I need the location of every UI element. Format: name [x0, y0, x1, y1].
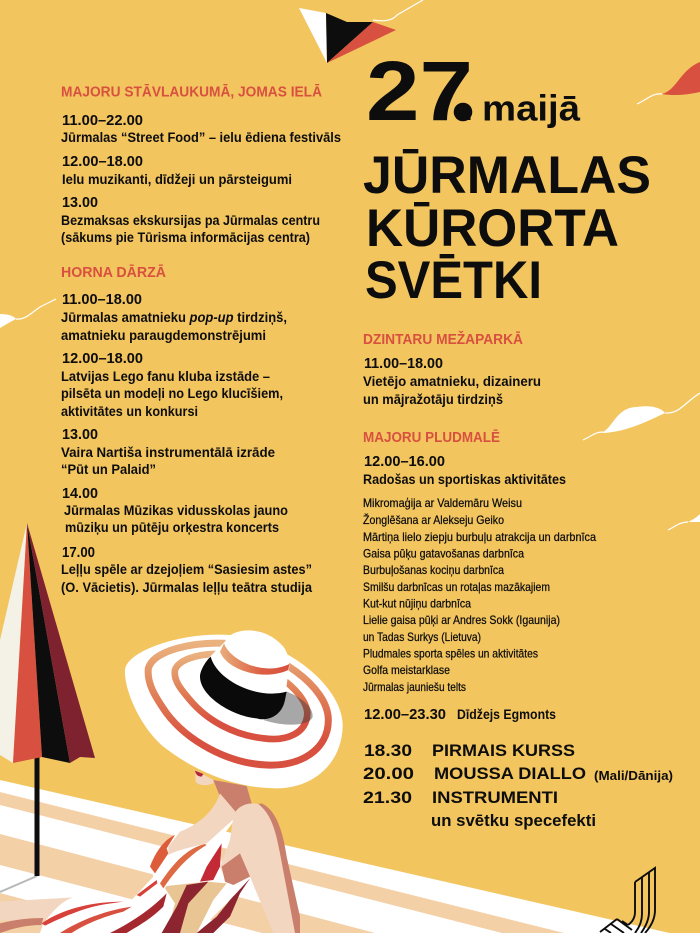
concert schedule [363, 741, 673, 830]
activities list [363, 496, 596, 694]
title: KŪRORTA [366, 199, 619, 258]
kite: white right [668, 514, 700, 530]
activities list: Kut-kut nūjiņu darbnīca [363, 596, 471, 610]
panel: Dzintaru mežaparkā: Vietējo amatnieku, dizaineru [363, 374, 541, 389]
panel: Horna dārzā: Jūrmalas amatnieku pop-up tirdziņš, [61, 310, 287, 325]
panel: Horna dārzā: 14.00 [62, 486, 98, 502]
activities list: Lielie gaisa pūķi ar Andres Sokk (Igaunija) [363, 613, 560, 627]
panel: Horna dārzā: 11.00–18.00 [62, 292, 142, 308]
date: 27. maijā: . [458, 66, 475, 133]
activities list: Jūrmalas jauniešu telts [363, 680, 466, 694]
activities list: Smilšu darbnīcas un rotaļas mazākajiem [363, 580, 550, 594]
title: JŪRMALAS [363, 146, 651, 205]
activities list: Burbuļošanas kociņu darbnīca [363, 563, 504, 577]
woman in striped swimsuit [0, 770, 300, 933]
panel: Horna dārzā: HORNA DĀRZĀ [61, 264, 167, 281]
panel: Horna dārzā: Leļļu spēle ar dzejoļiem “Sasiesim astes” [61, 562, 312, 577]
panel: Majoru pludmalē: 12.00–16.00 [364, 454, 445, 470]
kite: white left [0, 299, 56, 328]
panel: Horna dārzā: Vaira Nartiša instrumentālā izrāde [61, 445, 275, 460]
panel: Majoru stāvlaukumā: (sākums pie Tūrisma informācijas centra) [61, 230, 310, 245]
activities list: Žonglēšana ar Alekseju Geiko [363, 513, 504, 527]
panel: Majoru stāvlaukumā: Jūrmalas “Street Food” – ielu ēdiena festivāls [61, 130, 341, 145]
panel: Majoru pludmalē: Radošas un sportiskas aktivitātes [363, 472, 566, 487]
panel: Horna dārzā: amatnieku paraugdemonstrējumi [61, 328, 266, 343]
panel: Majoru pludmalē: MAJORU PLUDMALĒ [363, 429, 500, 446]
panel: Majoru stāvlaukumā: MAJORU STĀVLAUKUMĀ, JOMAS IELĀ [61, 84, 322, 100]
panel: Dzintaru mežaparkā [363, 330, 541, 407]
title [363, 146, 651, 310]
panel: Majoru stāvlaukumā: Ielu muzikanti, dīdžeji un pārsteigumi [62, 172, 292, 187]
panel: Majoru stāvlaukumā [61, 84, 341, 245]
panel: Horna dārzā: 13.00 [62, 427, 98, 443]
panel: Majoru stāvlaukumā: 12.00–18.00 [62, 154, 143, 170]
panel: Horna dārzā: aktivitātes un konkursi [61, 404, 198, 419]
panel: Horna dārzā: Jūrmalas Mūzikas vidusskolas jauno [64, 503, 288, 518]
panel: Majoru pludmalē: 12.00–23.30 [364, 707, 446, 723]
activities list: Mikromaģija ar Valdemāru Weisu [363, 496, 522, 510]
panel: Majoru pludmalē: Dīdžejs Egmonts [457, 707, 556, 722]
panel: Horna dārzā: 12.00–18.00 [62, 351, 143, 367]
logo: Jūrmala J [600, 868, 655, 933]
panel: Horna dārzā [61, 264, 312, 595]
panel: Dzintaru mežaparkā: 11.00–18.00 [364, 356, 443, 372]
concert schedule: 21.30 [363, 788, 412, 807]
panel: Horna dārzā: mūziķu un pūtēju orķestra koncerts [65, 520, 279, 535]
concert schedule: INSTRUMENTI [432, 788, 558, 807]
concert schedule: 20.00 [363, 764, 414, 783]
concert schedule: MOUSSA DIALLO [434, 764, 586, 783]
activities list: Mārtiņa lielo ziepju burbuļu atrakcija un darbnīca [363, 530, 596, 544]
panel: Majoru pludmalē [363, 429, 596, 723]
activities list: un Tadas Surkys (Lietuva) [363, 630, 481, 644]
activities list: Pludmales sporta spēles un aktivitātes [363, 646, 538, 660]
panel: Dzintaru mežaparkā: un mājražotāju tirdziņš [363, 392, 503, 407]
panel: Horna dārzā: Latvijas Lego fanu kluba izstāde – [61, 369, 270, 384]
beach stripes [0, 780, 700, 933]
kite: white large [583, 393, 700, 440]
panel: Majoru stāvlaukumā: 11.00–22.00 [62, 113, 143, 129]
beach umbrella [0, 523, 95, 892]
panel: Horna dārzā: pilsēta un modeļi no Lego klucīšiem, [61, 386, 283, 401]
panel: Horna dārzā: (O. Vācietis). Jūrmalas leļļu teātra studija [61, 580, 312, 595]
kite: tricolour [299, 0, 423, 63]
panel: Horna dārzā: 17.00 [62, 545, 95, 561]
panel: Majoru stāvlaukumā: 13.00 [62, 195, 98, 211]
concert schedule: un svētku specefekti [431, 811, 596, 830]
panel: Dzintaru mežaparkā: DZINTARU MEŽAPARKĀ [363, 330, 523, 348]
concert schedule: 18.30 [364, 741, 412, 760]
date: 27. maijā [366, 44, 581, 138]
concert schedule: PIRMAIS KURSS [432, 741, 575, 760]
panel: Horna dārzā: “Pūt un Palaid” [61, 462, 156, 477]
panel: Majoru stāvlaukumā: Bezmaksas ekskursijas pa Jūrmalas centru [61, 213, 320, 228]
striped hat [125, 630, 343, 788]
activities list: Gaisa pūķu gatavošanas darbnīca [363, 546, 524, 560]
concert schedule: (Mali/Dānija) [594, 769, 673, 783]
kite: red [637, 62, 700, 104]
title: SVĒTKI [365, 251, 542, 310]
date: 27. maijā: 27 [366, 44, 473, 138]
date: 27. maijā: maijā [482, 88, 581, 128]
activities list: Golfa meistarklase [363, 663, 450, 677]
